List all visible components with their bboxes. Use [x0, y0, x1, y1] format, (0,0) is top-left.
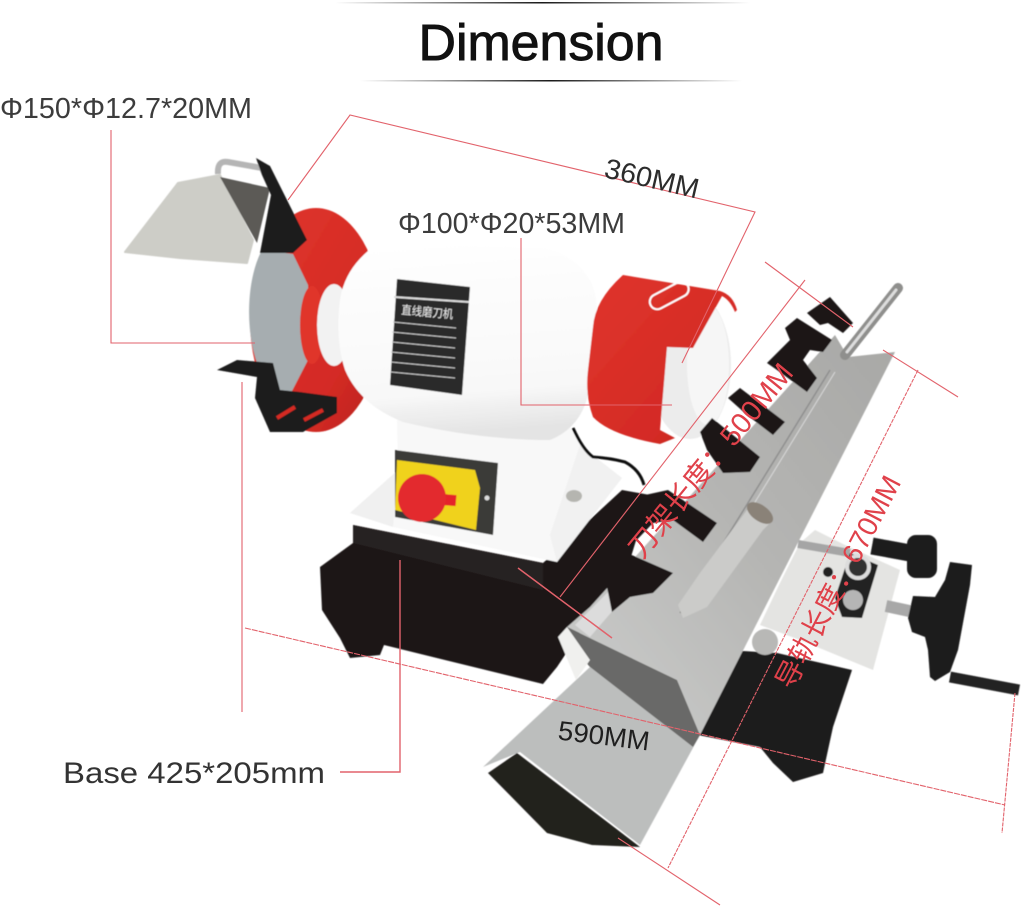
- right side plate and clamps: [752, 530, 937, 670]
- small steel pin: [845, 288, 898, 355]
- label: base size: Base 425*205mm: [63, 757, 325, 790]
- label: small wheel size: Φ100*Φ20*53MM: [398, 208, 625, 240]
- label: large wheel size: Φ150*Φ12.7*20MM: [0, 93, 252, 125]
- black machine base: [320, 490, 852, 782]
- white pedestal: [350, 420, 622, 562]
- machine: bench grinder: [125, 158, 1019, 847]
- clear eye shield: [125, 158, 307, 263]
- right wheel: [649, 291, 731, 439]
- dimension line: 360MM: [288, 115, 755, 363]
- grey grinding wheel: [249, 250, 308, 395]
- label: 590MM: 590MM: [556, 715, 651, 756]
- dimension line: tool rest 500MM: [518, 262, 853, 638]
- lower tool rest: [217, 360, 337, 432]
- dimension line: small wheel: [521, 238, 672, 405]
- label: guide rail length: 导轨长度：670MM: [770, 470, 907, 694]
- aluminium guide rail: [483, 335, 895, 847]
- red hub ring and shaft: [300, 284, 351, 366]
- label: 360MM: 360MM: [602, 153, 702, 204]
- dimension lines: [111, 115, 1015, 905]
- motor nameplate: [390, 279, 470, 395]
- label: tool rest length: 刀架长度：500MM: [622, 357, 800, 564]
- left red disc guard: [250, 208, 382, 432]
- dimension line: base: [340, 560, 400, 772]
- switch: [395, 450, 498, 535]
- motor body: [338, 242, 597, 440]
- large tapered steel pin: [678, 498, 777, 618]
- dimension line: 590MM: [242, 382, 1015, 833]
- right red guard: [587, 275, 737, 444]
- title: Dimension: [418, 14, 664, 71]
- dimension line: large wheel: [111, 130, 255, 343]
- hand wheel and crank: [908, 562, 1019, 690]
- dimension line: guide rail 670MM: [618, 350, 958, 905]
- power cable: [573, 428, 644, 485]
- row of black clamp knobs: [603, 297, 853, 612]
- motor nameplate: 直线磨刀机: [401, 303, 454, 322]
